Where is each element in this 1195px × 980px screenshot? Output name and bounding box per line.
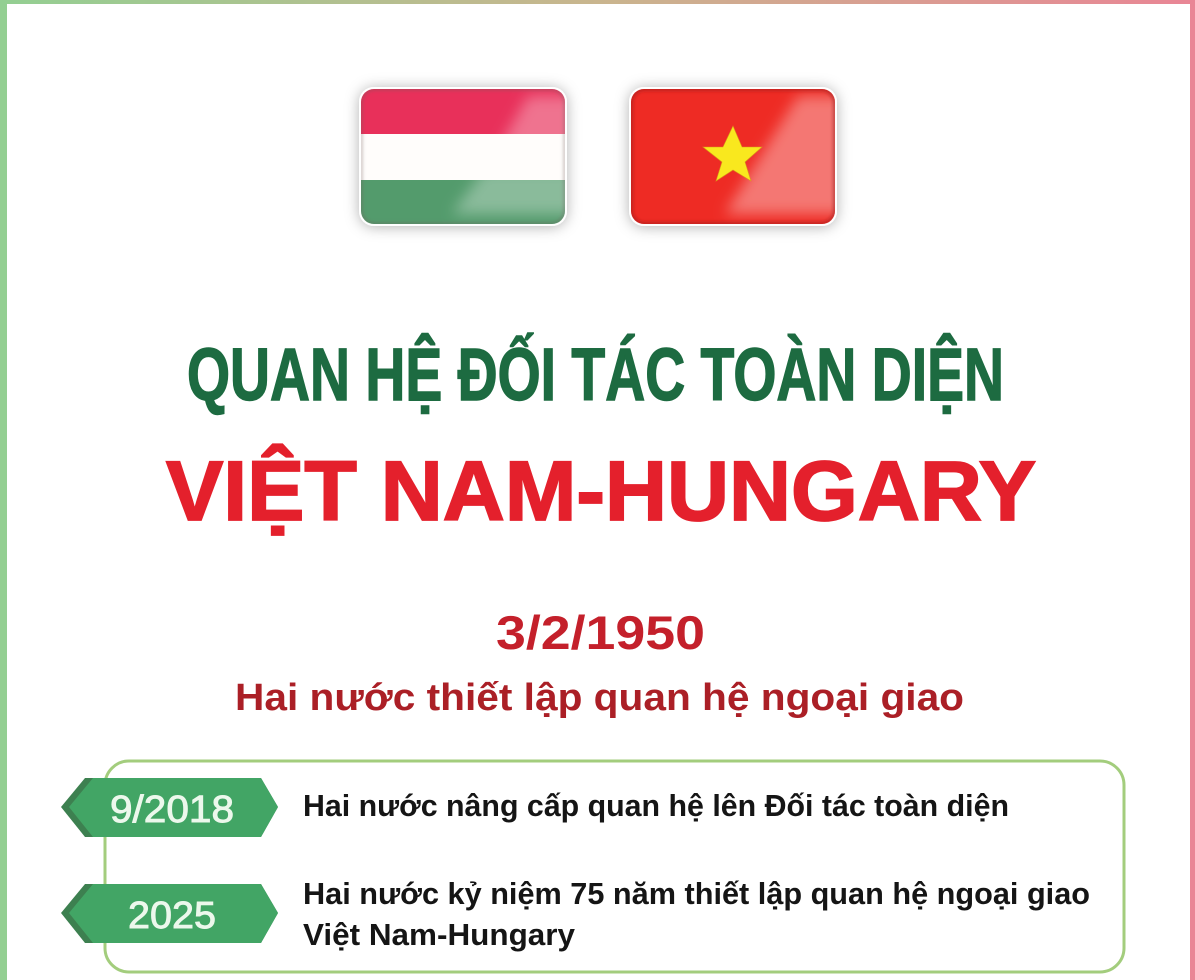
panel: timeline	[61, 761, 1124, 972]
text: 2025 event	[303, 876, 1090, 952]
text: diplomatic relations established: Hai nước thiết lập quan hệ ngoại giao	[235, 677, 964, 719]
text: 2025 event: Hai nước kỷ niệm 75 năm thiết lập quan hệ ngoại giao	[303, 876, 1090, 911]
badge: 9/2018	[61, 778, 278, 837]
text: 2018 event: Hai nước nâng cấp quan hệ lên Đối tác toàn diện	[303, 788, 1009, 823]
date: 3/2/1950: 3/2/1950	[496, 606, 705, 659]
badge: 2025: 2025	[128, 895, 216, 937]
badge: 2025	[61, 884, 278, 943]
text: 2025 event: Việt Nam-Hungary	[303, 917, 576, 952]
badge: 9/2018: 9/2018	[110, 789, 234, 831]
icon: Hungarian flag	[359, 87, 590, 226]
icon: Vietnamese flag	[629, 87, 860, 226]
title: Vietnam-Hungary: VIỆT NAM-HUNGARY	[166, 444, 1036, 538]
